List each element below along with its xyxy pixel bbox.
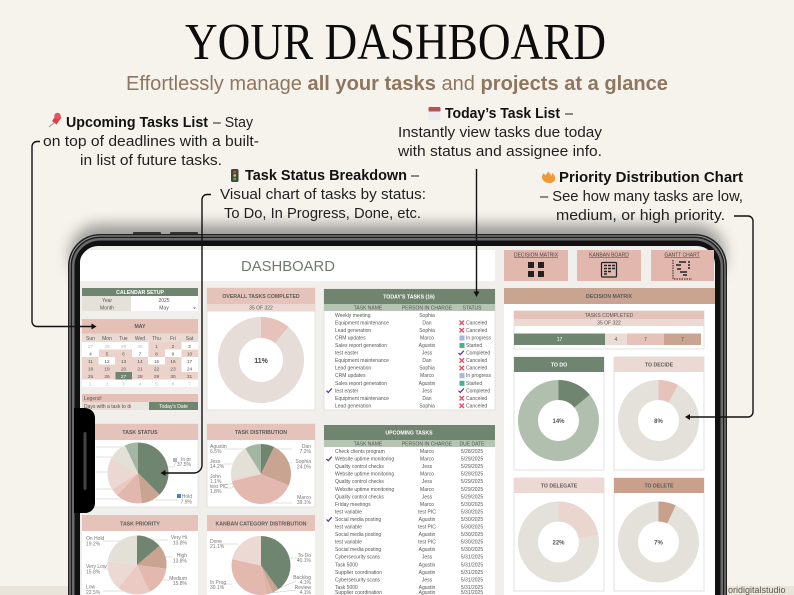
calendar: 20 xyxy=(121,366,126,372)
table: upcoming tasks: Check clients program xyxy=(335,449,385,455)
table: today's tasks: Sophia xyxy=(419,366,435,372)
calendar: 26 xyxy=(104,374,110,380)
calendar: 5 xyxy=(106,352,109,358)
table: upcoming tasks: 5/29/2025 xyxy=(461,479,483,485)
panel: task priority: Very Hi xyxy=(171,535,187,541)
calendar: 1 xyxy=(155,344,158,350)
tasks completed bar: 7 xyxy=(644,337,647,343)
arrow: priority chart to donut xyxy=(685,216,753,420)
callout: task status breakdown: Task Status Breakdown xyxy=(245,168,407,184)
table: today's tasks: Jess xyxy=(422,351,433,357)
donut chart: 22 percent: 22% xyxy=(552,540,565,546)
calendar: 1 xyxy=(89,382,92,388)
panel: kanban category distribution: 40.1% xyxy=(297,558,312,564)
calendar: 3 xyxy=(188,344,191,350)
panel: task distribution: 6.5% xyxy=(210,449,222,455)
panel: task distribution: 1.1% xyxy=(210,479,222,485)
calendar: 25 xyxy=(88,374,93,380)
calendar: 27 xyxy=(121,374,126,380)
arrow: today's task list to table xyxy=(474,169,480,297)
calendar: Sat xyxy=(186,336,194,342)
callout: priority distribution chart: medium, or high priority. xyxy=(556,208,725,224)
calendar: Thu xyxy=(152,336,161,342)
callout: priority distribution chart: Priority Distribution Chart xyxy=(559,170,743,186)
table: today's tasks: Lead generation xyxy=(335,403,371,409)
button: decision matrix xyxy=(504,250,568,281)
table: upcoming tasks: Agustin xyxy=(419,532,436,538)
table: upcoming tasks: test variable xyxy=(335,540,362,546)
table: upcoming tasks: Marco xyxy=(420,502,434,508)
table: upcoming tasks: Social media posting xyxy=(335,532,381,538)
panel: task priority: 13.8% xyxy=(173,558,188,564)
card: to delete: TO DELETE xyxy=(644,484,674,490)
table: upcoming tasks: Quality control checks xyxy=(335,494,384,500)
donut chart: 8 percent: 8% xyxy=(654,419,664,425)
table: today's tasks: Lead generation xyxy=(335,366,371,372)
calendar: 10 xyxy=(187,352,192,358)
arrow: upcoming tasks to calendar xyxy=(32,142,97,330)
callout: upcoming tasks list: in list of future tasks. xyxy=(80,153,222,169)
table: upcoming tasks: Jess xyxy=(422,479,433,485)
table: upcoming tasks: 5/31/2025 xyxy=(461,555,483,561)
calendar: 16 xyxy=(170,359,176,365)
table: upcoming tasks: Cybersecurity scans xyxy=(335,577,381,583)
table: upcoming tasks: Jess xyxy=(422,555,433,561)
table: upcoming tasks: Marco xyxy=(420,457,434,463)
card: to do xyxy=(514,357,604,470)
card: to delegate xyxy=(514,478,604,591)
panel: task status: In pr xyxy=(181,457,191,463)
table: upcoming tasks: 5/31/2025 xyxy=(461,570,483,576)
tasks completed bar: 17 xyxy=(557,337,562,343)
panel: task priority: On Hold xyxy=(86,536,105,542)
calendar: 15 xyxy=(154,359,159,365)
table: upcoming tasks: PERSON IN CHARGE xyxy=(402,442,453,448)
pie chart: task status xyxy=(107,442,169,504)
table: upcoming tasks: Marco xyxy=(420,472,434,478)
table: upcoming tasks: Agustin xyxy=(419,547,436,553)
table: today's tasks: Lead generation xyxy=(335,328,371,334)
calendar: 17 xyxy=(187,359,192,365)
table: upcoming tasks: 5/31/2025 xyxy=(461,562,483,568)
card: to decide xyxy=(614,357,704,470)
table: upcoming tasks: Task 5000 xyxy=(335,585,358,591)
table: today's tasks: Completed xyxy=(466,388,490,394)
callout: priority distribution chart: – See how many tasks are low, xyxy=(540,189,743,205)
calendar setup panel: CALENDAR SETUP xyxy=(116,290,164,296)
card: to delete xyxy=(614,478,704,591)
table: today's tasks: Sales report generation xyxy=(335,381,387,387)
panel: task priority: Low xyxy=(86,584,96,590)
table: upcoming tasks: test PIC xyxy=(418,540,436,546)
table: upcoming tasks: 5/30/2025 xyxy=(461,547,483,553)
calendar: 6 xyxy=(172,382,175,388)
tablet frame xyxy=(68,224,727,595)
panel: task priority: TASK PRIORITY xyxy=(120,522,160,528)
table: today's tasks: Completed xyxy=(466,351,490,357)
panel: task priority: 15.8% xyxy=(86,570,101,576)
calendar: 2 xyxy=(172,344,175,350)
panel: task priority: High xyxy=(177,553,187,559)
table: upcoming tasks: DUE DATE xyxy=(460,442,485,448)
button: kanban board: KANBAN BOARD xyxy=(589,252,629,258)
table: upcoming tasks: TASK NAME xyxy=(354,442,383,448)
calendar: 13 xyxy=(121,359,126,365)
table: upcoming tasks: 5/31/2025 xyxy=(461,577,483,583)
panel: task priority xyxy=(82,515,198,595)
panel: task status: 37.5% xyxy=(177,462,192,468)
table: upcoming tasks: Jess xyxy=(422,577,433,583)
table: today's tasks: Marco xyxy=(420,373,434,379)
panel: task distribution: 1.8% xyxy=(210,489,222,495)
pie chart: task distribution xyxy=(231,444,291,504)
table: upcoming tasks: Supplier coordination xyxy=(335,570,382,576)
calendar legend: Today's Date xyxy=(159,404,188,410)
table: today's tasks: Agustin xyxy=(419,343,436,349)
table: today's tasks: Weekly meeting xyxy=(335,313,371,319)
table: today's tasks: Started xyxy=(466,381,482,387)
table: today's tasks: Canceled xyxy=(466,396,487,402)
table: today's tasks: Agustin xyxy=(419,381,436,387)
table: today's tasks: Dan xyxy=(422,396,432,402)
panel: task distribution: Agustin xyxy=(210,444,227,450)
table: upcoming tasks: Agustin xyxy=(419,562,436,568)
callout: task status breakdown: To Do, In Progress, Done, etc. xyxy=(224,206,421,222)
table: today's tasks: TASK NAME xyxy=(354,306,383,312)
table: upcoming tasks: Quality control checks xyxy=(335,464,384,470)
panel: kanban category distribution: Review xyxy=(295,585,311,591)
callout: upcoming tasks list: on top of deadlines with a built- xyxy=(43,134,259,150)
icon: calendar xyxy=(428,107,440,120)
dashboard title bar xyxy=(80,250,495,281)
table: upcoming tasks: Agustin xyxy=(419,570,436,576)
table: upcoming tasks: UPCOMING TASKS xyxy=(385,430,433,436)
calendar setup panel: 2025 xyxy=(158,298,170,304)
donut chart: 14 percent: 14% xyxy=(552,419,565,425)
calendar: 8 xyxy=(155,352,158,358)
calendar setup panel: Year xyxy=(102,298,112,304)
calendar: 9 xyxy=(172,352,175,358)
calendar: 27 xyxy=(88,344,93,350)
calendar xyxy=(82,319,198,388)
calendar: 4 xyxy=(139,382,142,388)
donut chart: 7 percent: 7% xyxy=(654,540,664,546)
calendar: 24 xyxy=(187,366,192,372)
table: upcoming tasks: Website uptime monitoring xyxy=(335,457,394,463)
calendar: 7 xyxy=(188,382,191,388)
button: gantt chart xyxy=(651,250,714,281)
panel: kanban category distribution: To-Do xyxy=(298,553,311,559)
table: today's tasks: Marco xyxy=(420,336,434,342)
calendar: 28 xyxy=(104,344,110,350)
panel: task priority: 13.8% xyxy=(173,540,188,546)
panel: task distribution: Marco xyxy=(297,495,311,501)
callout: upcoming tasks list: – Stay xyxy=(213,115,254,131)
card: to do: TO DO xyxy=(551,362,567,368)
table: today's tasks: Equipment maintenance xyxy=(335,358,389,364)
panel: kanban category distribution: 30.1% xyxy=(210,585,225,591)
panel: task distribution: 24.0% xyxy=(297,464,312,470)
tasks completed bar: 35 OF 322 xyxy=(597,320,621,326)
panel: kanban category distribution: In Prog xyxy=(210,580,226,586)
pie chart: kanban categories xyxy=(232,536,291,595)
table: upcoming tasks: 5/30/2025 xyxy=(461,517,483,523)
calendar: Tue xyxy=(119,336,128,342)
calendar: 4 xyxy=(89,352,92,358)
table: upcoming tasks: Marco xyxy=(420,449,434,455)
tasks completed bar xyxy=(514,311,704,349)
panel: task status: Hold xyxy=(182,494,192,500)
subtitle: Effortlessly manage all your tasks and projects at a glance xyxy=(126,73,668,95)
calendar: Fri xyxy=(170,336,176,342)
panel: overall tasks completed: OVERALL TASKS COMPLETED xyxy=(222,294,300,300)
icon: pushpin xyxy=(49,113,62,127)
calendar: 18 xyxy=(88,366,93,372)
table: today's tasks: Canceled xyxy=(466,328,487,334)
table: upcoming tasks: 5/30/2025 xyxy=(461,524,483,530)
table: today's tasks: CRM updates xyxy=(335,336,366,342)
callout: upcoming tasks list: Upcoming Tasks List xyxy=(66,115,208,131)
panel: overall tasks completed: 35 OF 322 xyxy=(249,306,273,312)
callout: upcoming tasks list xyxy=(43,113,259,169)
table: upcoming tasks: Cybersecurity scans xyxy=(335,555,381,561)
donut chart: 11 percent: 11% xyxy=(254,358,269,365)
table: today's tasks: Canceled xyxy=(466,358,487,364)
calendar: 6 xyxy=(122,352,125,358)
callout: today's task list: – xyxy=(565,106,574,122)
panel: task status: TASK STATUS xyxy=(122,430,158,436)
dashboard screen xyxy=(80,246,715,595)
icon: traffic light xyxy=(231,169,238,182)
table: upcoming tasks: 5/31/2025 xyxy=(461,585,483,591)
callout: today's task list: with status and assignee info. xyxy=(397,144,602,160)
card: to delegate: TO DELEGATE xyxy=(541,484,578,490)
tasks completed bar: TASKS COMPLETED xyxy=(585,313,634,319)
table: upcoming tasks xyxy=(324,425,495,595)
calendar legend: Days with a task to do xyxy=(84,404,133,410)
tasks completed bar: 7 xyxy=(681,337,684,343)
panel: kanban category distribution xyxy=(207,515,315,595)
callout: today's task list xyxy=(397,106,603,160)
calendar: Wed xyxy=(135,336,145,342)
panel: task distribution: Jess xyxy=(210,459,221,465)
calendar: 2 xyxy=(106,382,109,388)
table: today's tasks: Canceled xyxy=(466,366,487,372)
table: upcoming tasks: Website uptime monitoring xyxy=(335,487,394,493)
button: decision matrix: DECISION MATRIX xyxy=(514,252,559,258)
table: upcoming tasks: 5/30/2025 xyxy=(461,532,483,538)
panel: task status: 7.9% xyxy=(181,500,193,506)
icon: flame xyxy=(542,171,555,183)
panel: task priority: 19.2% xyxy=(86,542,101,548)
table: upcoming tasks: test variable xyxy=(335,524,362,530)
table: upcoming tasks: 5/29/2025 xyxy=(461,487,483,493)
table: upcoming tasks: Social media posting xyxy=(335,547,381,553)
table: upcoming tasks: Task 5000 xyxy=(335,562,358,568)
table: today's tasks: Dan xyxy=(422,320,432,326)
button: kanban board xyxy=(577,250,641,281)
panel: task priority: Medium xyxy=(169,576,187,582)
calendar: Mon xyxy=(102,336,112,342)
table: upcoming tasks: 5/29/2025 xyxy=(461,494,483,500)
panel: task distribution: test PIC xyxy=(210,484,228,490)
table: upcoming tasks: Marco xyxy=(420,487,434,493)
callout: today's task list: Today’s Task List xyxy=(445,106,560,122)
panel: task priority: Very Low xyxy=(86,564,107,570)
calendar legend: Legend: xyxy=(84,396,102,402)
panel: task distribution: TASK DISTRIBUTION xyxy=(235,430,287,436)
panel: task distribution: Sophia xyxy=(295,459,311,465)
table: upcoming tasks: test variable xyxy=(335,509,362,515)
panel: task distribution: Dan xyxy=(302,444,311,450)
table: today's tasks: Sophia xyxy=(419,313,435,319)
table: today's tasks: TODAY'S TASKS (16) xyxy=(383,294,435,300)
calendar setup panel: May xyxy=(159,306,169,312)
table: today's tasks: Canceled xyxy=(466,320,487,326)
table: upcoming tasks: Jess xyxy=(422,494,433,500)
icon: gantt chart xyxy=(673,260,692,279)
calendar: 5 xyxy=(155,382,158,388)
table: today's tasks xyxy=(324,289,495,410)
watermark: oridigitalstudio xyxy=(728,585,786,595)
calendar: 3 xyxy=(122,382,125,388)
calendar: 28 xyxy=(137,374,143,380)
panel: kanban category distribution: Backlog xyxy=(293,575,311,581)
pie chart: task priority xyxy=(107,535,167,594)
table: upcoming tasks: Agustin xyxy=(419,517,436,523)
table: today's tasks: STATUS xyxy=(463,306,482,312)
table: upcoming tasks: Agustin xyxy=(419,585,436,591)
calendar: 30 xyxy=(170,374,176,380)
table: today's tasks: test easter xyxy=(335,388,359,394)
table: today's tasks: CRM updates xyxy=(335,373,366,379)
panel: task distribution: 14.2% xyxy=(210,464,225,470)
card: to decide: TO DECIDE xyxy=(645,362,674,368)
table: today's tasks: Dan xyxy=(422,358,432,364)
table: upcoming tasks: 5/30/2025 xyxy=(461,502,483,508)
panel: kanban category distribution: Done xyxy=(210,539,222,545)
table: today's tasks: Canceled xyxy=(466,403,487,409)
table: today's tasks: Started xyxy=(466,343,482,349)
table: upcoming tasks: 5/29/2025 xyxy=(461,457,483,463)
calendar: 30 xyxy=(137,344,143,350)
calendar: 22 xyxy=(154,366,159,372)
panel: task distribution: 39.1% xyxy=(297,500,312,506)
calendar: 14 xyxy=(137,359,143,365)
dashboard title bar: DASHBOARD xyxy=(241,259,335,275)
table: today's tasks: test easter xyxy=(335,351,359,357)
table: today's tasks: Equipment maintenance xyxy=(335,320,389,326)
status icons xyxy=(326,320,464,408)
panel: decision matrix xyxy=(504,288,715,595)
table: today's tasks: In progress xyxy=(466,336,492,342)
callout: task status breakdown: Visual chart of tasks by status: xyxy=(220,187,426,203)
completed check marks xyxy=(326,457,332,521)
table: upcoming tasks: 5/29/2025 xyxy=(461,472,483,478)
table: upcoming tasks: Jess xyxy=(422,464,433,470)
table: today's tasks: Sophia xyxy=(419,328,435,334)
callout: priority distribution chart xyxy=(540,170,743,224)
panel: kanban category distribution: 21.1% xyxy=(210,544,225,550)
table: upcoming tasks: 5/29/2025 xyxy=(461,464,483,470)
calendar: 7 xyxy=(139,352,142,358)
calendar: 12 xyxy=(104,359,110,365)
table: upcoming tasks: Friday meetings xyxy=(335,502,371,508)
callout: task status breakdown xyxy=(220,168,426,222)
table: today's tasks: Jess xyxy=(422,388,433,394)
table: upcoming tasks: Quality control checks xyxy=(335,479,384,485)
calendar: 29 xyxy=(154,374,159,380)
table: today's tasks: In progress xyxy=(466,373,492,379)
table: upcoming tasks: test PIC xyxy=(418,524,436,530)
calendar: MAY xyxy=(134,324,146,330)
panel: kanban category distribution: KANBAN CATEGORY DISTRIBUTION xyxy=(216,522,307,528)
calendar: Sun xyxy=(86,336,95,342)
callout: task status breakdown: – xyxy=(411,168,420,184)
panel: task distribution: John xyxy=(210,474,221,480)
title: YOUR DASHBOARD xyxy=(185,14,606,71)
panel: kanban category distribution: 4.1% xyxy=(300,580,312,586)
table: today's tasks: Equipment maintenance xyxy=(335,396,389,402)
calendar: 29 xyxy=(121,344,126,350)
panel: task distribution xyxy=(207,424,315,507)
table: upcoming tasks: Website uptime monitoring xyxy=(335,472,394,478)
table: upcoming tasks: test PIC xyxy=(418,509,436,515)
panel: task status xyxy=(82,424,198,507)
panel: task distribution: 7.2% xyxy=(300,449,312,455)
table: today's tasks: Sales report generation xyxy=(335,343,387,349)
table: upcoming tasks: 5/30/2025 xyxy=(461,540,483,546)
callout: today's task list: Instantly view tasks due today xyxy=(398,125,603,141)
table: today's tasks: Sophia xyxy=(419,403,435,409)
arrow: task status to pie chart xyxy=(160,194,211,476)
calendar: 21 xyxy=(137,366,143,372)
panel: task priority: 15.8% xyxy=(173,581,188,587)
calendar legend xyxy=(82,394,198,410)
panel: decision matrix: DECISION MATRIX xyxy=(586,294,633,300)
tablet camera notch xyxy=(74,408,95,513)
tasks completed bar: 4 xyxy=(615,337,618,343)
table: today's tasks: PERSON IN CHARGE xyxy=(402,306,453,312)
calendar: 11 xyxy=(88,359,93,365)
table: upcoming tasks: 5/28/2025 xyxy=(461,449,483,455)
calendar: 19 xyxy=(104,366,110,372)
table: upcoming tasks: 5/30/2025 xyxy=(461,509,483,515)
button: gantt chart: GANTT CHART xyxy=(664,252,700,258)
calendar setup panel: Month xyxy=(100,306,114,312)
table: upcoming tasks: Social media posting xyxy=(335,517,381,523)
calendar: 23 xyxy=(170,366,176,372)
icon: matrix grid xyxy=(528,262,544,277)
calendar setup panel xyxy=(82,288,198,312)
icon: kanban board xyxy=(602,262,616,277)
calendar: 31 xyxy=(187,374,192,380)
panel: overall tasks completed xyxy=(207,288,315,410)
